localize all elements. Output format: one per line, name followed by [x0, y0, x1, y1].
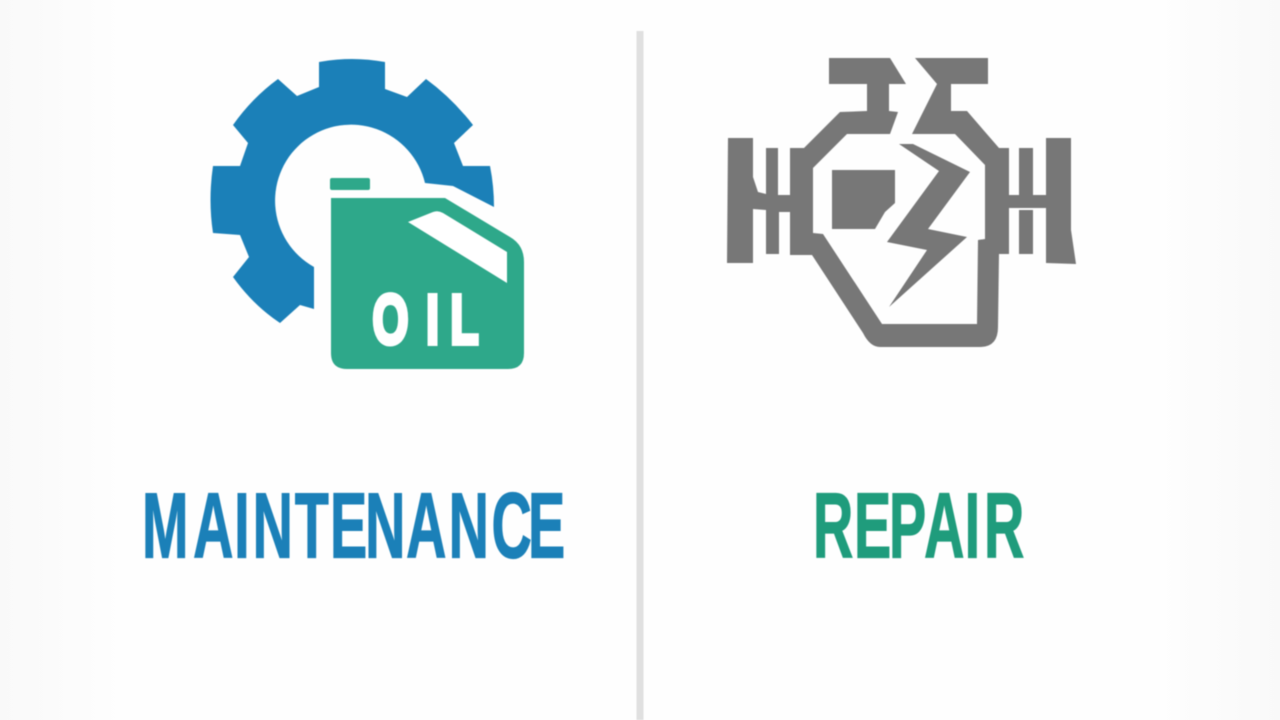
divider	[636, 31, 644, 720]
icon: gear	[210, 59, 494, 323]
panel: repair	[727, 58, 1076, 578]
oil label: OIL	[373, 280, 479, 359]
panel: maintenance	[142, 59, 565, 578]
icon: engine	[727, 58, 1076, 347]
icon: oil jug	[330, 178, 524, 369]
heading: repair: REPAIR	[813, 475, 1024, 578]
heading: maintenance: MAINTENANCE	[142, 475, 565, 578]
